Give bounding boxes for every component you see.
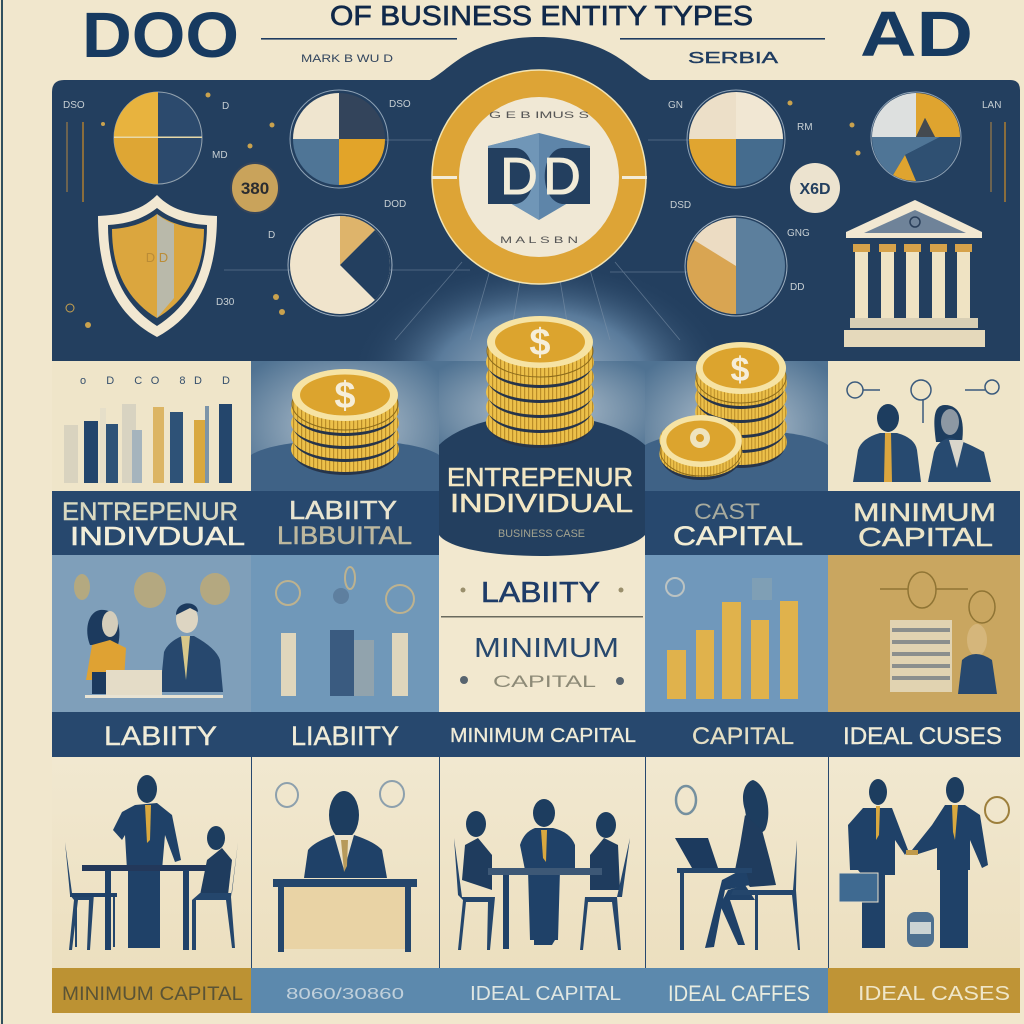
man figure — [160, 603, 223, 692]
panel: row 1 column 5 with people — [828, 361, 1020, 491]
subheading: CAPITAL — [493, 672, 596, 691]
center medallion: M A L S B N — [500, 235, 578, 245]
woman figure — [928, 405, 991, 482]
panel: row 1 column 1 — [52, 361, 251, 491]
label: LABIITY — [104, 721, 217, 751]
panel: row 2 column 3 liability — [441, 577, 643, 691]
label: IDEAL CASES — [858, 983, 1010, 1005]
panel: dark top panel — [52, 37, 1020, 498]
scene 4: woman with laptop — [675, 780, 800, 950]
panel: row 2 column 5 gold — [828, 555, 1020, 712]
label: IDEAL CAPITAL — [470, 983, 621, 1005]
pie chart 3 — [288, 214, 392, 316]
title AD: AD — [860, 0, 973, 70]
woman figure — [86, 610, 126, 694]
blurred bar chart — [281, 630, 408, 696]
decorative labels: LAN — [982, 100, 1001, 111]
pie chart 2 — [290, 90, 388, 188]
label: 8060/30860 — [286, 986, 404, 1003]
title DOO: DOO — [82, 0, 239, 71]
decorative labels: GN — [668, 100, 683, 111]
center medallion: D — [500, 148, 538, 206]
pie chart 4 — [687, 90, 785, 188]
icon: coin stack: $ — [334, 375, 356, 417]
badge 360: X6D — [799, 181, 831, 198]
decorative labels: DSD — [670, 200, 691, 211]
label: CAST — [694, 499, 760, 524]
icon: coin stack with side coin: $ — [731, 351, 750, 389]
label: IDEAL CUSES — [843, 723, 1002, 750]
small text: BUSINESS CASE — [498, 528, 585, 540]
decorative labels: MD — [212, 150, 228, 161]
label: LIBBUITAL — [277, 522, 412, 550]
icon: tall coin stack — [486, 316, 594, 448]
label: IDEAL CAFFES — [668, 981, 810, 1006]
panel: row 3 cards — [52, 757, 1020, 1013]
icon: shield — [98, 195, 217, 337]
country label: SERBIA — [688, 50, 779, 67]
pie chart 5 — [871, 92, 961, 182]
decorative labels: D — [222, 101, 229, 112]
label: MINIMUM CAPITAL — [62, 984, 243, 1005]
scene 1: man at table — [65, 775, 238, 950]
icon: shield: D D — [146, 250, 168, 265]
heading: MINIMUM — [474, 632, 619, 663]
center medallion: G E B IMUS S — [489, 110, 589, 120]
icon: tall coin stack: $ — [529, 322, 551, 364]
panel: row 1 column 4 with coins — [645, 342, 828, 491]
icon: coin stack with side coin — [659, 342, 787, 480]
heading: INDIVIDUAL — [450, 488, 633, 518]
label: LIABIITY — [291, 721, 399, 751]
panel: row 2 column 4 bar chart — [645, 555, 828, 712]
label: CAPITAL — [858, 522, 993, 552]
scene 3: three people meeting — [454, 799, 630, 950]
bar chart — [64, 404, 232, 483]
decorative labels: RM — [797, 122, 813, 133]
label: ENTREPENUR — [62, 498, 238, 526]
decorative labels: DSO — [389, 99, 411, 110]
center medallion — [432, 70, 647, 284]
pie chart 1 — [114, 92, 202, 184]
pie chart 6 — [685, 216, 787, 316]
decorative labels: DD — [790, 282, 804, 293]
label: CAPITAL — [692, 723, 794, 750]
label: MINIMUM — [853, 499, 996, 527]
scene 2: man at desk — [273, 781, 417, 952]
bottom label bars — [52, 968, 1020, 1013]
panel: row 2 column 1 meeting — [52, 555, 251, 712]
center medallion: D — [543, 148, 581, 206]
scene 5: two men shaking hands — [839, 777, 1009, 948]
decorative labels: DSO — [63, 100, 85, 111]
man figure — [853, 404, 921, 482]
label: CAPITAL — [673, 521, 803, 551]
panel: row 1 column 3 with coins — [439, 316, 645, 712]
panel: row 1 column 1: o D CO 8D D — [80, 375, 230, 387]
icon: coin stack — [291, 369, 399, 475]
decorative labels — [63, 99, 1001, 308]
label: MINIMUM CAPITAL — [450, 725, 636, 747]
label: LABIITY — [289, 495, 397, 525]
icon: classical building — [844, 200, 985, 347]
decorative labels: D — [268, 230, 275, 241]
person — [958, 624, 997, 694]
badge 360 — [790, 163, 840, 213]
header — [82, 0, 973, 71]
label: INDIVDUAL — [70, 521, 245, 551]
badge 380 — [231, 163, 279, 213]
decorative labels: GNG — [787, 228, 810, 239]
table document — [890, 620, 952, 692]
panel: row 1 column 2 with coins — [251, 361, 439, 491]
heading: ENTREPENUR — [447, 462, 633, 492]
row 2 label bars — [52, 712, 1020, 757]
small header text: MARK B WU D — [301, 53, 393, 65]
main heading: OF BUSINESS ENTITY TYPES — [330, 0, 753, 31]
panel: row 2 column 2 — [251, 555, 439, 712]
decorative labels: DOD — [384, 199, 406, 210]
decorative labels: D30 — [216, 297, 235, 308]
badge 380: 380 — [241, 179, 269, 198]
heading: LABIITY — [481, 577, 600, 609]
bar chart — [667, 601, 798, 699]
row 1 label bars — [52, 491, 1020, 555]
